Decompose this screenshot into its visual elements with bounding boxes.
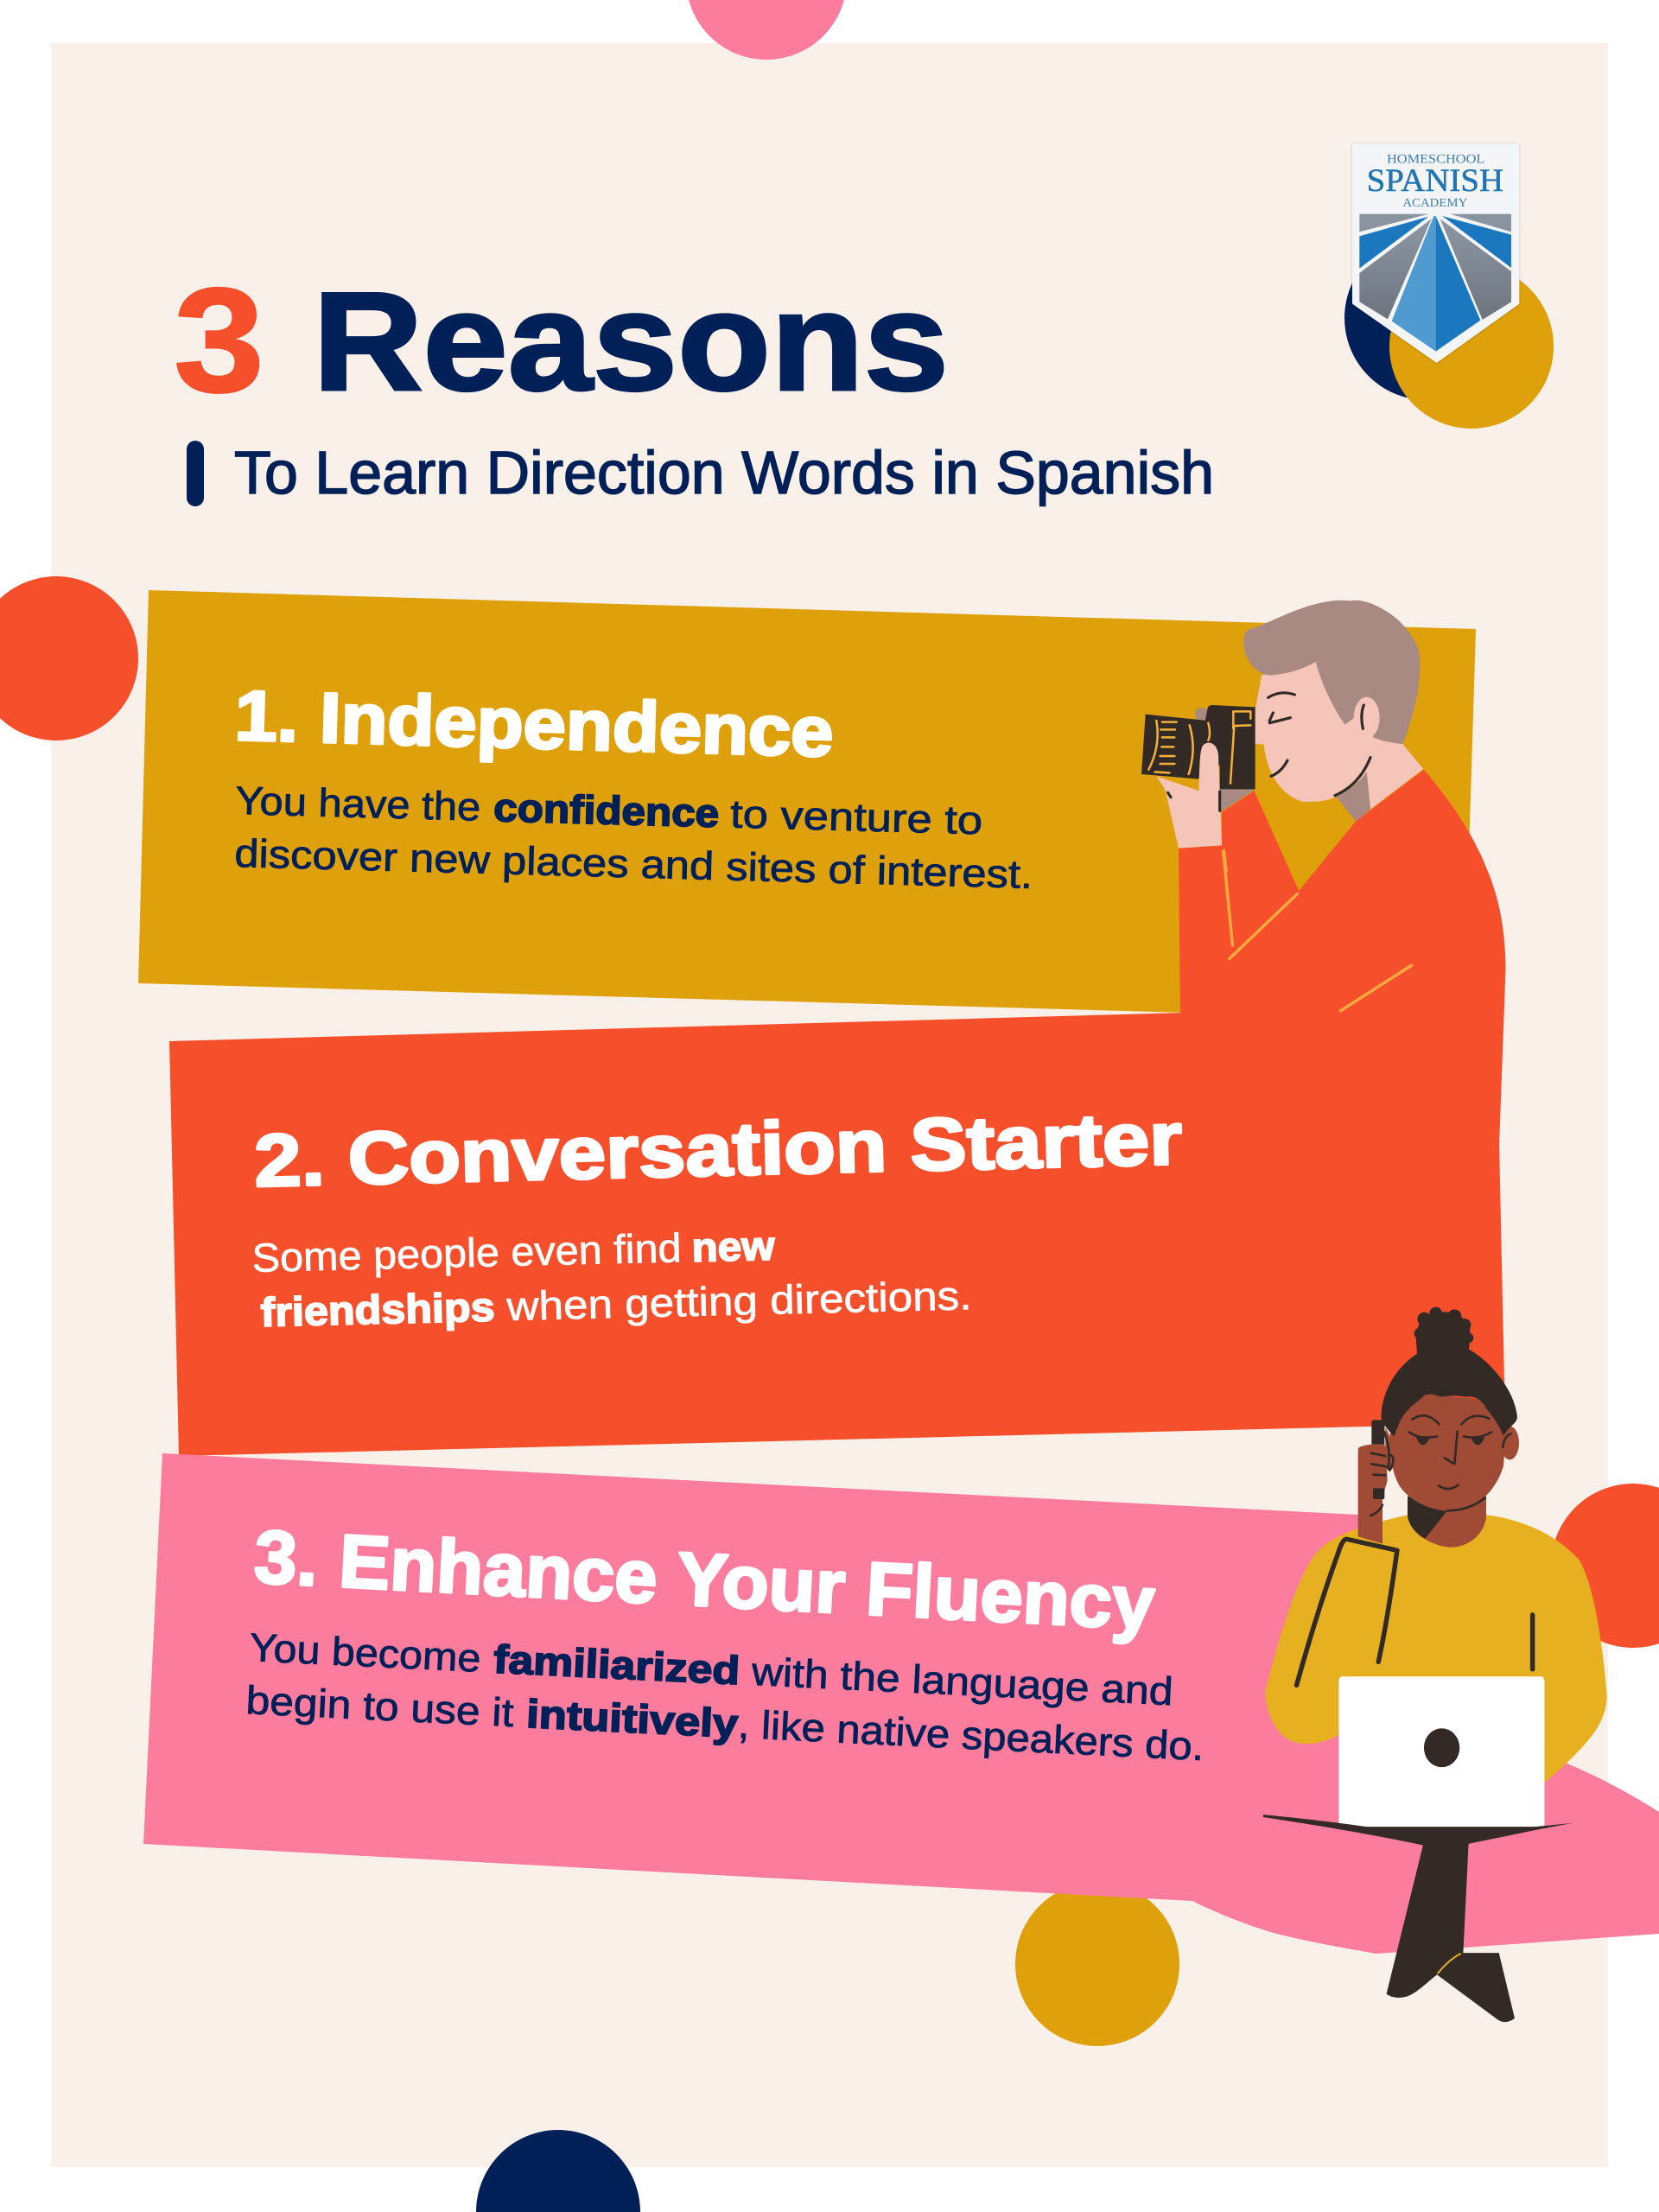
illustration: man with camera xyxy=(1141,601,1505,1146)
logo: Homeschool Spanish Academy: HOMESCHOOL xyxy=(1387,151,1484,166)
logo: Homeschool Spanish Academy xyxy=(1352,144,1519,363)
reason 2 body text: when getting directions. xyxy=(505,1272,972,1329)
reason 3 body text: intuitively xyxy=(525,1691,740,1746)
reason 3 body text: , like native speakers do. xyxy=(737,1701,1205,1769)
decorative circle: left orange xyxy=(0,576,138,741)
reason 1 body text: confidence xyxy=(493,785,720,836)
logo: Homeschool Spanish Academy: SPANISH xyxy=(1367,162,1503,198)
reason 2 body text: friendships xyxy=(260,1283,495,1335)
panel: orange banner xyxy=(169,1007,1504,1456)
reason 1 body text xyxy=(234,778,1033,897)
subtitle with bar: To Learn Direction Words in Spanish xyxy=(234,439,1214,506)
decorative circles behind logo xyxy=(1344,236,1554,429)
decorative circle: bottom gold xyxy=(1015,1882,1179,2046)
reason 2 body text xyxy=(251,1223,972,1335)
reason 1 body text: You have the xyxy=(235,778,481,830)
decorative circle: top pink xyxy=(686,0,847,60)
reason 1 heading: 1. Independence xyxy=(233,677,835,772)
reason 2 body text: new xyxy=(691,1223,776,1270)
title: 3 xyxy=(174,257,264,423)
logo: Homeschool Spanish Academy: ACADEMY xyxy=(1402,196,1467,209)
reason 3 body text: familiarized xyxy=(493,1637,741,1693)
decorative circle: right orange xyxy=(1551,1484,1659,1648)
illustration: woman with laptop xyxy=(1263,1307,1607,2022)
reason 3 body text: with the language and xyxy=(750,1649,1174,1713)
reason 3 body text: You become xyxy=(249,1624,482,1681)
reason 3 body text: begin to use it xyxy=(245,1677,515,1735)
reason 3 heading: 3. Enhance Your Fluency xyxy=(252,1515,1157,1646)
reason 2 body text: Some people even find xyxy=(251,1224,682,1281)
title: Reasons xyxy=(313,264,949,420)
reason 2 heading: 2. Conversation Starter xyxy=(253,1097,1183,1203)
panel: pink banner with leg shape xyxy=(143,1453,1659,1954)
decorative circle: bottom navy xyxy=(476,2130,640,2212)
reason 1 body text: to venture to xyxy=(730,791,983,842)
panel: gold banner xyxy=(138,590,1476,1020)
reason 3 body text xyxy=(245,1624,1205,1769)
reason 1 body text: discover new places and sites of interest. xyxy=(234,830,1033,897)
